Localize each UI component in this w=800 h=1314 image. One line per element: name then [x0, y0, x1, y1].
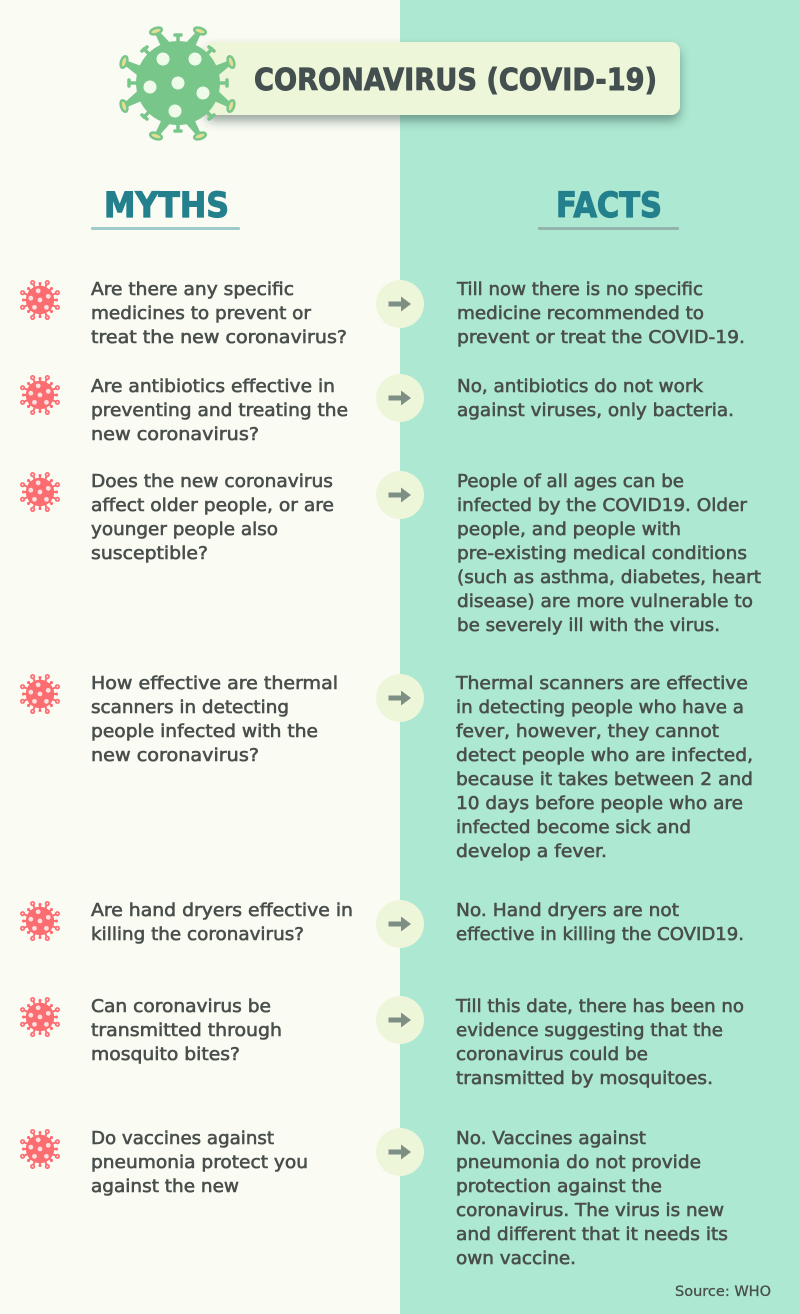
myth 1: medicines to prevent or [91, 303, 312, 324]
arrow 5 [376, 900, 424, 948]
arrow 2 [376, 374, 424, 422]
fact 3: disease) are more vulnerable to [457, 591, 753, 612]
icon: large green coronavirus [119, 26, 236, 141]
fact 6 [455, 996, 744, 1089]
panel: myths background [0, 0, 400, 1314]
myth 7: against the new [91, 1176, 239, 1197]
fact 5: effective in killing the COVID19. [456, 924, 744, 945]
fact 4: Thermal scanners are effective [455, 673, 748, 694]
fact 1: medicine recommended to [457, 303, 704, 324]
fact 4: fever, however, they cannot [456, 721, 719, 742]
fact 3: infected by the COVID19. Older [457, 495, 748, 516]
source note: Source: WHO [675, 1284, 771, 1300]
icon: red virus 2 [20, 375, 60, 415]
arrow 6 [376, 996, 424, 1044]
icon: red virus 7 [20, 1129, 60, 1169]
arrow 4 [376, 674, 424, 722]
fact 7: and different that it needs its [456, 1224, 728, 1245]
icon: red virus 4 [20, 674, 60, 714]
myth 3: younger people also [91, 519, 278, 540]
arrow 7 [376, 1128, 424, 1176]
myth 7 [91, 1128, 308, 1197]
myth 7: Do vaccines against [91, 1128, 274, 1149]
myth 6: Can coronavirus be [91, 996, 271, 1017]
myth 5: killing the coronavirus? [91, 924, 304, 945]
fact 6: transmitted by mosquitoes. [456, 1068, 713, 1089]
fact 6: Till this date, there has been no [455, 996, 744, 1017]
myth 3: susceptible? [91, 543, 208, 564]
myth 6 [91, 996, 282, 1065]
myth 3 [91, 471, 334, 564]
myth 1: treat the new coronavirus? [91, 327, 347, 348]
heading: myths: MYTHS [104, 186, 229, 226]
myth 4 [91, 673, 338, 766]
myth 2 [91, 376, 348, 445]
myth 7: pneumonia protect you [91, 1152, 308, 1173]
fact 4: infected become sick and [456, 817, 691, 838]
fact 4: 10 days before people who are [456, 793, 743, 814]
icon: red virus 5 [20, 901, 60, 941]
fact 4 [455, 673, 753, 862]
myth 3: affect older people, or are [91, 495, 334, 516]
fact 3 [457, 471, 761, 636]
fact 4: develop a fever. [456, 841, 607, 862]
title banner: CORONAVIRUS (COVID-19) [254, 63, 657, 98]
myth 1 [91, 279, 347, 348]
fact 3: be severely ill with the virus. [457, 615, 720, 636]
fact 7: own vaccine. [456, 1248, 576, 1269]
fact 5 [456, 900, 744, 945]
myth 4: people infected with the [91, 721, 318, 742]
fact 3: People of all ages can be [457, 471, 684, 492]
arrow 3 [376, 471, 424, 519]
myth 2: Are antibiotics effective in [91, 376, 335, 397]
myth 2: new coronavirus? [91, 424, 259, 445]
fact 4: detect people who are infected, [456, 745, 753, 766]
myth 5 [91, 900, 353, 945]
fact 7: coronavirus. The virus is new [456, 1200, 724, 1221]
fact 4: in detecting people who have a [456, 697, 744, 718]
fact 4: because it takes between 2 and [456, 769, 753, 790]
fact 1 [456, 279, 745, 348]
myth 6: transmitted through [91, 1020, 282, 1041]
fact 6: coronavirus could be [456, 1044, 648, 1065]
fact 7: protection against the [456, 1176, 662, 1197]
panel: facts background [400, 0, 800, 1314]
icon: red virus 6 [20, 997, 60, 1037]
myth 4: scanners in detecting [91, 697, 289, 718]
fact 1: prevent or treat the COVID-19. [457, 327, 745, 348]
fact 7: No. Vaccines against [456, 1128, 646, 1149]
arrow 1 [376, 280, 424, 328]
fact 2 [457, 376, 734, 421]
fact 2: against viruses, only bacteria. [457, 400, 734, 421]
fact 7 [456, 1128, 728, 1269]
fact 3: people, and people with [457, 519, 681, 540]
fact 7: pneumonia do not provide [456, 1152, 701, 1173]
heading: facts: FACTS [556, 186, 662, 226]
fact 3: (such as asthma, diabetes, heart [457, 567, 761, 588]
myth 4: new coronavirus? [91, 745, 259, 766]
title banner [205, 42, 680, 115]
myth 6: mosquito bites? [91, 1044, 240, 1065]
fact 2: No, antibiotics do not work [457, 376, 704, 397]
fact 6: evidence suggesting that the [456, 1020, 723, 1041]
myth 4: How effective are thermal [91, 673, 338, 694]
myth 3: Does the new coronavirus [91, 471, 333, 492]
fact 1: Till now there is no specific [456, 279, 703, 300]
fact 5: No. Hand dryers are not [456, 900, 679, 921]
icon: red virus 3 [20, 472, 60, 512]
myth 5: Are hand dryers effective in [91, 900, 353, 921]
fact 3: pre-existing medical conditions [457, 543, 747, 564]
icon: red virus 1 [20, 280, 60, 320]
myth 1: Are there any specific [91, 279, 294, 300]
myth 2: preventing and treating the [91, 400, 348, 421]
